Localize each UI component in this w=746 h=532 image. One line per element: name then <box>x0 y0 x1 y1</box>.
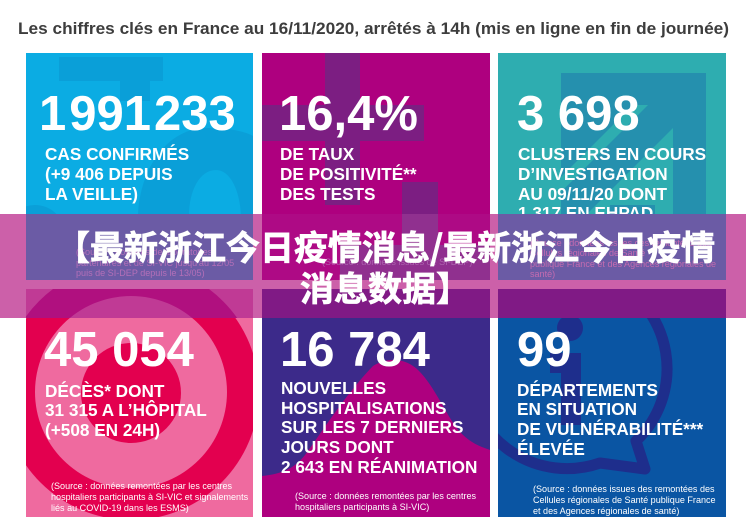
faint source: clusters: santé) <box>530 269 555 279</box>
faint source: cas confirmés: (Source : données de laboratoires <box>76 247 213 257</box>
faint source: clusters: Cellules régionales de Santé <box>530 248 645 258</box>
panel: hospitalisations <box>262 289 490 517</box>
faint source: clusters: publique France et des Agences régionales de <box>530 259 716 269</box>
source: hospitalisations: hospitaliers participants à SI-VIC) <box>295 502 429 512</box>
banner headline: 【最新浙江今日疫情消息/最新浙江今日疫情 <box>56 221 715 270</box>
label: départements: DÉPARTEMENTS <box>517 380 658 400</box>
number: taux de positivité: 16,4% <box>279 87 418 141</box>
label: cas confirmés: CAS CONFIRMÉS <box>45 144 189 164</box>
panel: cas confirmés <box>26 53 253 214</box>
label: clusters: AU 09/11/20 DONT <box>518 184 668 204</box>
number: cas confirmés: 1991233 <box>39 87 236 141</box>
title: Les chiffres clés en France au 16/11/2020, arrêtés à 14h (mis en ligne en fin de journée) <box>18 19 729 38</box>
label: clusters: D’INVESTIGATION <box>518 164 668 184</box>
panel: taux de positivité <box>262 53 490 280</box>
title banner <box>0 214 746 318</box>
number: décès: 45 054 <box>44 323 194 377</box>
number: départements: 99 <box>517 323 572 377</box>
label: décès: DÉCÈS* DONT <box>45 381 165 401</box>
label: taux de positivité: DE TAUX <box>280 144 355 164</box>
number: clusters: 3 698 <box>517 87 640 141</box>
banner headline: 消息数据】 <box>300 262 470 311</box>
label: décès: (+508 EN 24H) <box>45 420 160 440</box>
source: décès: liés au COVID-19 dans les ESMS) <box>51 503 189 513</box>
icon: info speech bubble <box>498 318 672 474</box>
label: hospitalisations: SUR LES 7 DERNIERS <box>281 417 463 437</box>
label: hospitalisations: 2 643 EN RÉANIMATION <box>281 457 477 477</box>
label: départements: EN SITUATION <box>517 399 637 419</box>
label: départements: ÉLEVÉE <box>517 439 585 459</box>
label: cas confirmés: (+9 406 DEPUIS <box>45 164 173 184</box>
label: hospitalisations: JOURS DONT <box>281 437 394 457</box>
number: hospitalisations: 16 784 <box>280 323 430 377</box>
faint source: positivité: (Source : données issues de SI-DEP) <box>322 257 472 267</box>
label: cas confirmés: LA VEILLE) <box>45 184 138 204</box>
panel: décès <box>26 318 253 517</box>
panel: départements <box>498 318 726 517</box>
source: départements: Cellules régionales de Santé publique France <box>533 495 716 505</box>
label: clusters ehpad: 1 317 EN EHPAD <box>518 203 653 223</box>
label: décès: 31 315 A L’HÔPITAL <box>45 400 207 420</box>
label: taux de positivité: DE POSITIVITÉ** <box>280 164 417 184</box>
source: départements: (Source : données issues des remontées des <box>533 484 715 494</box>
source: décès: (Source : données remontées par les centres <box>51 481 233 491</box>
label: clusters: CLUSTERS EN COURS <box>518 144 706 164</box>
source: hospitalisations: (Source : données remontées par les centres <box>295 491 477 501</box>
label: départements: DE VULNÉRABILITÉ*** <box>517 419 704 439</box>
source: départements: et des Agences régionales de santé) <box>533 506 679 516</box>
source: décès: hospitaliers participants à SI-VIC et signalements <box>51 492 249 502</box>
faint source: clusters: (Source : données issues des remontées des <box>530 238 712 248</box>
panel: clusters <box>498 53 726 280</box>
faint source: cas confirmés: puis de SI-DEP depuis le 13/05) <box>76 268 205 278</box>
faint source: cas confirmés: partenaires et de SI-VIC jusqu'au 12/05 <box>76 258 234 268</box>
label: taux de positivité: DES TESTS <box>280 184 376 204</box>
label: hospitalisations: HOSPITALISATIONS <box>281 398 447 418</box>
label: hospitalisations: NOUVELLES <box>281 378 386 398</box>
